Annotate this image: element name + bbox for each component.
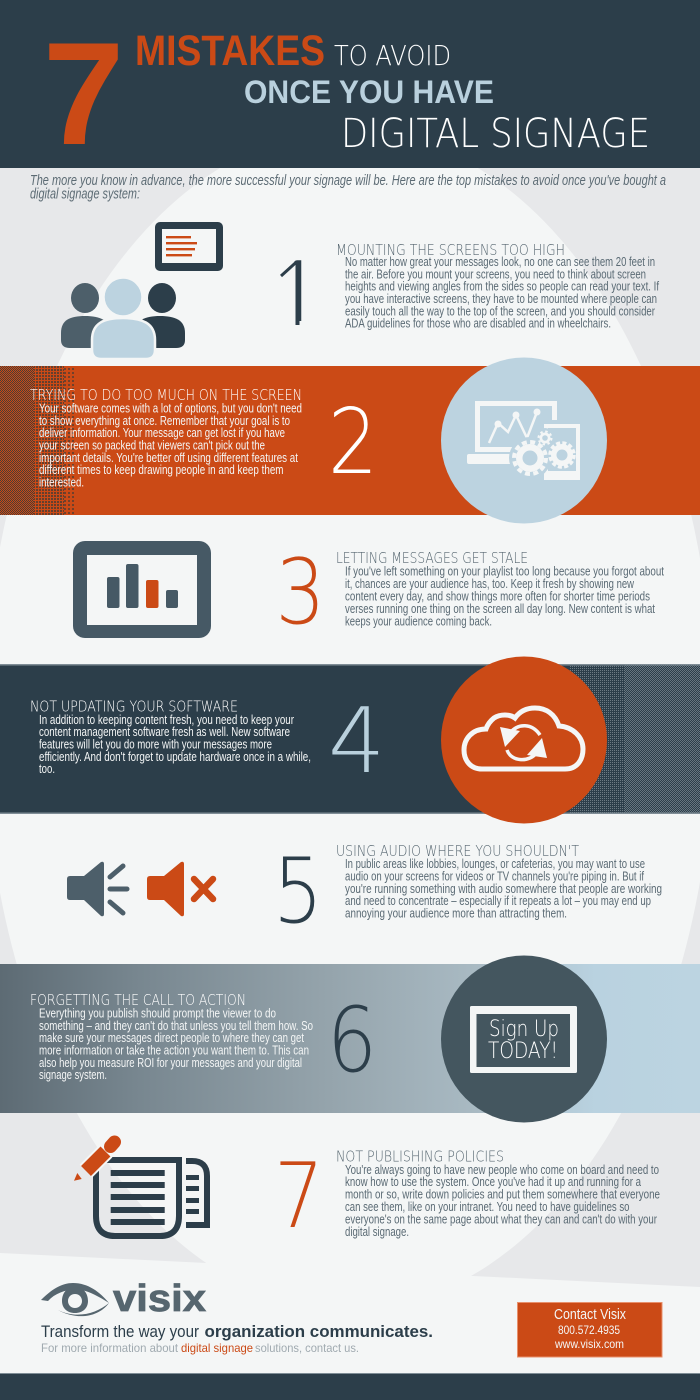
- body: also help you measure ROI for your messages and your digital: [39, 1056, 302, 1070]
- sign up text: TODAY!: [488, 1039, 558, 1064]
- icon: cloud sync in circle: [441, 656, 607, 824]
- tagline: organization communicates.: [204, 1322, 433, 1341]
- body: make sure your messages direct people to where they can get: [39, 1031, 304, 1045]
- step 4 number: 4: [328, 689, 385, 794]
- heading: TRYING TO DO TOO MUCH ON THE SCREEN: [30, 386, 302, 404]
- title: mistakes: MISTAKES: [135, 27, 325, 75]
- step 6 number: 6: [327, 988, 377, 1093]
- logo: visix: [41, 1278, 206, 1320]
- body: keeps your audience coming back.: [345, 614, 492, 628]
- body: [39, 713, 311, 776]
- body: [345, 255, 659, 331]
- icon: front page: [96, 1160, 179, 1236]
- contact box: Contact Visix: [554, 1306, 626, 1323]
- body: [345, 857, 662, 921]
- body: ADA guidelines for those who are disabled and in wheelchairs.: [345, 317, 611, 331]
- footer sub-line: For more information about: [41, 1341, 179, 1355]
- sign up text: Sign Up: [489, 1017, 559, 1042]
- icon: eye: [41, 1283, 109, 1316]
- heading: FORGETTING THE CALL TO ACTION: [30, 991, 246, 1009]
- step 7 number: 7: [274, 1144, 324, 1249]
- step 3 number: 3: [276, 540, 326, 645]
- contact box: 800.572.4935: [558, 1323, 620, 1337]
- tagline: [41, 1322, 433, 1341]
- body: [39, 402, 302, 490]
- header panel: [0, 0, 700, 175]
- sign up text: [488, 1017, 559, 1064]
- step 1 text: [336, 241, 659, 331]
- body: more information or take the action you want them to. This can: [39, 1044, 309, 1058]
- footer bar: [0, 1373, 700, 1400]
- footer sub-line: digital signage: [181, 1341, 253, 1355]
- body: different times to keep drawing people in and keep them: [39, 463, 284, 477]
- body: important details. You're better off using different features at: [39, 451, 298, 465]
- body: to show everything at once. Remember that your goal is to: [39, 414, 290, 428]
- icon: screen and audience: [61, 222, 223, 359]
- intro text: digital signage system:: [30, 186, 140, 202]
- title: big 7: 7: [43, 12, 124, 175]
- body: annoying your audience more than attracting them.: [345, 907, 567, 921]
- step 5 number: 5: [273, 839, 323, 944]
- icon: sign up button in circle: [441, 956, 607, 1122]
- heading: MOUNTING THE SCREENS TOO HIGH: [336, 241, 565, 259]
- tagline: Transform the way your: [41, 1322, 199, 1341]
- step 1 number: 1: [269, 243, 326, 348]
- step 4 text: [30, 698, 311, 776]
- contact box: www.visix.com: [554, 1337, 624, 1351]
- body: too.: [39, 762, 55, 776]
- icon: pencil: [74, 1142, 114, 1181]
- body: [39, 1007, 313, 1082]
- wordmark: visix: [113, 1278, 206, 1320]
- body: Everything you publish should prompt the viewer to do: [39, 1007, 276, 1021]
- body: efficiently. And don't forget to update hardware once in a while,: [39, 750, 311, 764]
- step 2 text: [30, 386, 302, 490]
- icon: chart on tablet: [73, 541, 211, 638]
- body: In addition to keeping content fresh, you need to keep your: [39, 713, 294, 727]
- step 6 text: [30, 991, 313, 1082]
- title: digital signage: DIGITAL SIGNAGE: [341, 111, 650, 157]
- body: Your software comes with a lot of options, but you don't need: [39, 402, 302, 416]
- body: digital signage.: [345, 1225, 409, 1239]
- icon: speakers: [67, 862, 213, 916]
- step 7 text: [336, 1148, 660, 1239]
- icon: document and pencil: [74, 1142, 207, 1236]
- icon: speaker on: [67, 862, 127, 916]
- heading: NOT UPDATING YOUR SOFTWARE: [30, 698, 238, 716]
- body: [345, 565, 664, 628]
- body: content management software fresh as well. New software: [39, 725, 290, 739]
- title: once you have: ONCE YOU HAVE: [244, 74, 494, 110]
- body: something – and they can't do that unless you tell them how. So: [39, 1019, 313, 1033]
- icon: speaker muted: [147, 862, 213, 916]
- heading: USING AUDIO WHERE YOU SHOULDN'T: [336, 842, 579, 860]
- step 5 text: [336, 842, 662, 921]
- step 3 text: [336, 549, 664, 628]
- heading: LETTING MESSAGES GET STALE: [336, 549, 528, 567]
- icon: devices and gears in circle: [441, 358, 607, 524]
- band 6 panel: [0, 964, 700, 1113]
- body: deliver information. Your message can get lost if you have: [39, 426, 285, 440]
- step 2 number: 2: [328, 390, 378, 495]
- body: your screen so packed that viewers can't pick out the: [39, 438, 265, 452]
- band 4 panel: [0, 664, 700, 814]
- body: [345, 1163, 660, 1239]
- band 2 panel: [0, 366, 700, 515]
- footer sub-line: [41, 1341, 359, 1355]
- body: signage system.: [39, 1068, 107, 1082]
- body: features will let you do more with your messages more: [39, 738, 272, 752]
- heading: NOT PUBLISHING POLICIES: [336, 1148, 504, 1166]
- body: interested.: [39, 476, 84, 490]
- footer sub-line: solutions, contact us.: [255, 1341, 359, 1355]
- step 1 number: [280, 260, 302, 325]
- icon: people: [61, 278, 185, 359]
- intro text: [30, 173, 666, 202]
- icon: wall screen: [155, 222, 223, 271]
- title: to avoid: TO AVOID: [334, 40, 451, 72]
- icon: back page: [186, 1161, 207, 1225]
- contact box: [518, 1302, 662, 1357]
